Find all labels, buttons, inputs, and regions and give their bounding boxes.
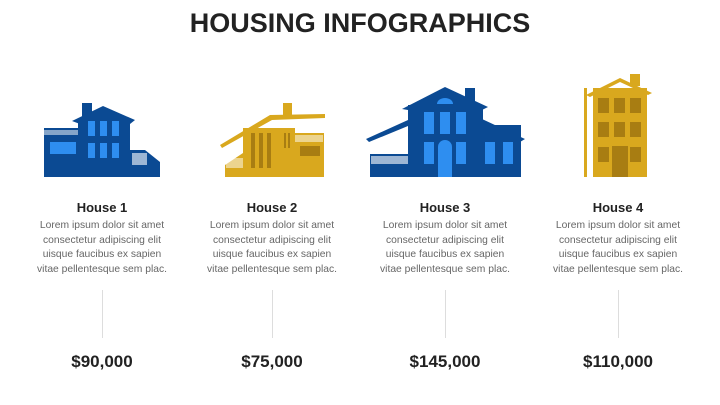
column: house 1: vitae pellentesque sem plac.	[37, 264, 167, 274]
houses illustration	[44, 74, 652, 177]
column: house 1: consectetur adipiscing elit	[43, 234, 161, 246]
arrow 1	[102, 290, 103, 338]
arrow 3	[445, 290, 446, 338]
column: house 2: uisque faucibus ex sapien	[213, 249, 331, 260]
price 4: $110,000	[583, 352, 653, 371]
column: house 4: uisque faucibus ex sapien	[559, 249, 677, 260]
column: house 3: Lorem ipsum dolor sit amet	[383, 220, 507, 231]
column: house 4: Lorem ipsum dolor sit amet	[556, 220, 680, 231]
arrow 2	[272, 290, 273, 338]
column: house 4	[553, 200, 683, 274]
column: house 4: House 4	[593, 200, 643, 215]
column: house 3: House 3	[420, 200, 470, 215]
column: house 2: Lorem ipsum dolor sit amet	[210, 220, 334, 231]
price 2: $75,000	[241, 352, 303, 371]
column: house 3	[380, 200, 510, 274]
price 3: $145,000	[410, 352, 480, 371]
column: house 3: vitae pellentesque sem plac.	[380, 264, 510, 274]
icon: house 1	[44, 103, 160, 177]
column: house 2: vitae pellentesque sem plac.	[207, 264, 337, 274]
arrow 4	[618, 290, 619, 338]
column: house 2: consectetur adipiscing elit	[213, 234, 331, 246]
column: house 3: uisque faucibus ex sapien	[386, 249, 504, 260]
icon: house 3	[366, 87, 525, 177]
price 1: $90,000	[71, 352, 133, 371]
column: house 2	[207, 200, 337, 274]
column: house 1	[37, 200, 167, 274]
icon: house 2	[220, 103, 325, 177]
title: HOUSING INFOGRAPHICS	[190, 8, 530, 38]
column: house 1: uisque faucibus ex sapien	[43, 249, 161, 260]
column: house 2: House 2	[247, 200, 297, 215]
column: house 1: Lorem ipsum dolor sit amet	[40, 220, 164, 231]
column: house 4: vitae pellentesque sem plac.	[553, 264, 683, 274]
column: house 4: consectetur adipiscing elit	[559, 234, 677, 246]
icon: house 4	[584, 74, 652, 177]
column: house 3: consectetur adipiscing elit	[386, 234, 504, 246]
column: house 1: House 1	[77, 200, 127, 215]
